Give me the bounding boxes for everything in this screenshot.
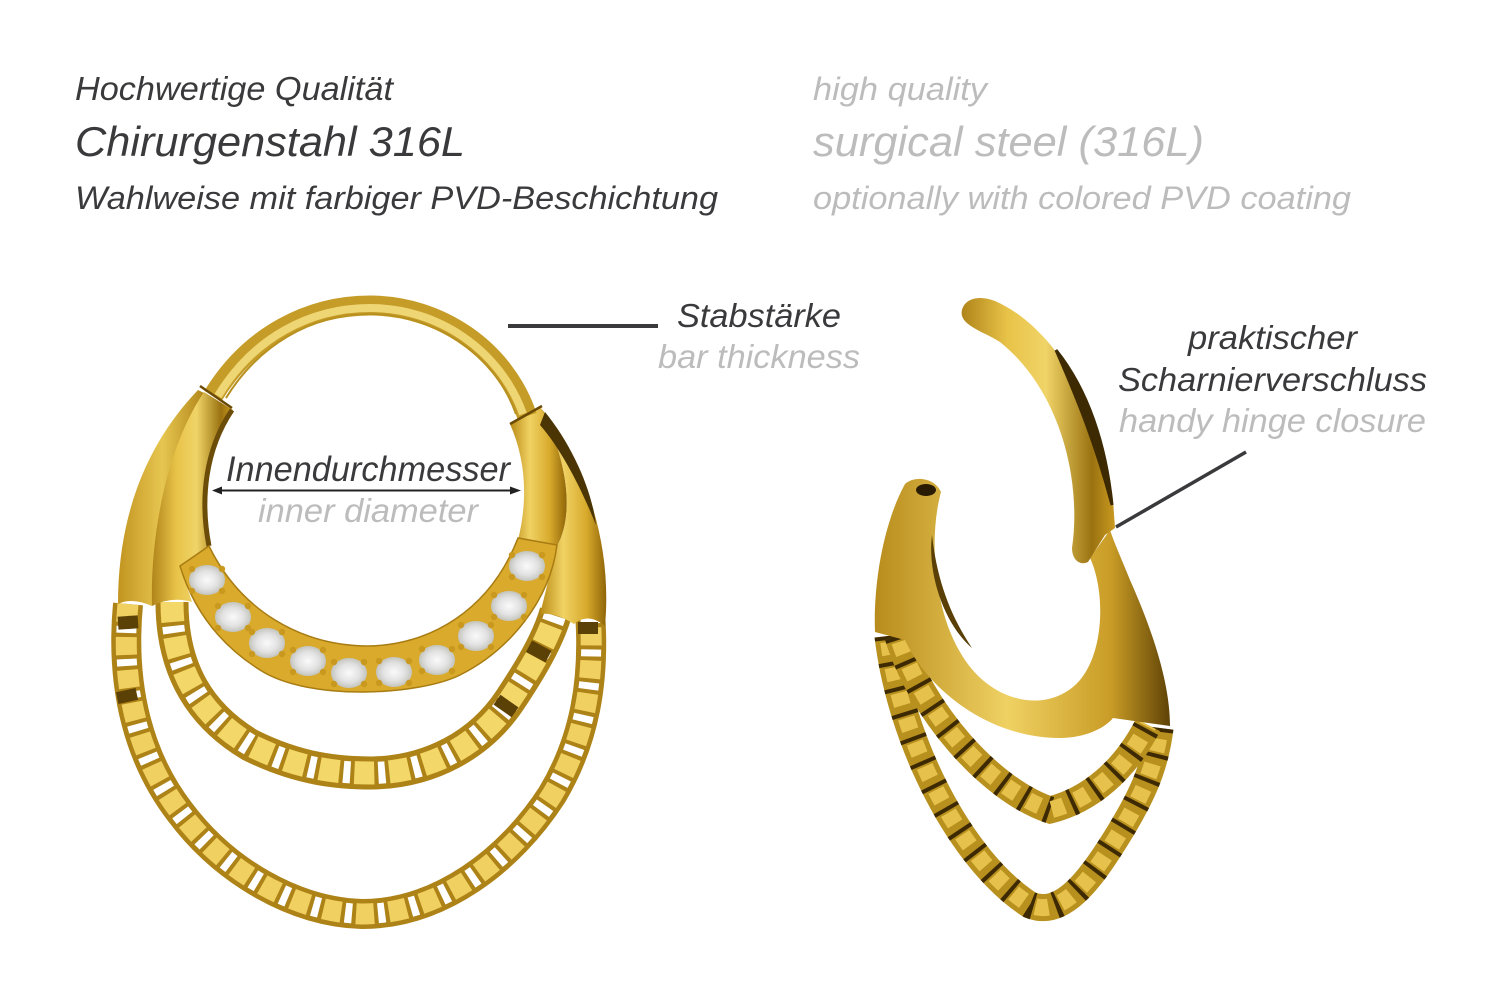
jewellery: front view of the ring with chains (116, 306, 606, 914)
tube opening (916, 484, 936, 496)
right ring side (510, 408, 567, 546)
text: Scharnierverschluss: Scharnierverschluss (1118, 361, 1427, 398)
text: Chirurgenstahl 316L: Chirurgenstahl 316L (75, 118, 465, 165)
text: inner diameter: inner diameter (258, 492, 480, 529)
callout: bar thickness (508, 297, 860, 375)
dark inner edge, left (205, 410, 232, 546)
callout: hinge closure (1116, 319, 1427, 527)
left wing (118, 390, 206, 606)
heading: English product description (813, 71, 1351, 216)
text: Innendurchmesser: Innendurchmesser (226, 450, 511, 489)
upper hinged arc (962, 298, 1115, 563)
outer chain (126, 604, 591, 914)
pave band (180, 538, 557, 692)
arrow: inner diameter (212, 486, 521, 494)
inner chain (172, 602, 556, 773)
text: bar thickness: bar thickness (658, 338, 860, 375)
leader line (508, 324, 658, 328)
label: inner diameter (212, 450, 521, 529)
left ring side (152, 392, 233, 606)
text: praktischer: praktischer (1187, 319, 1359, 356)
text: Stabstärke: Stabstärke (677, 297, 841, 334)
heading: German product description (75, 70, 718, 216)
jewellery: side view with open hinge (875, 298, 1170, 908)
front chain (898, 636, 1148, 810)
leader line (1116, 452, 1246, 527)
hinge seams (200, 386, 542, 424)
dark reflection on lower ring (931, 535, 972, 648)
text: handy hinge closure: handy hinge closure (1119, 402, 1426, 439)
text: Hochwertige Qualität: Hochwertige Qualität (75, 70, 395, 107)
dark reflection on right wing (540, 412, 596, 525)
dark chain link windows (116, 615, 598, 717)
text: Wahlweise mit farbiger PVD-Beschichtung: Wahlweise mit farbiger PVD-Beschichtung (75, 180, 718, 216)
lower ring and wings (875, 479, 1170, 738)
rear chain (888, 636, 1160, 908)
text: surgical steel (316L): surgical steel (316L) (813, 118, 1204, 165)
text: optionally with colored PVD coating: optionally with colored PVD coating (813, 180, 1351, 216)
dark reflection on upper arc (1056, 350, 1112, 505)
right wing (540, 408, 606, 626)
top ring arc (213, 306, 527, 416)
text: high quality: high quality (813, 71, 989, 107)
zirconia stones (189, 551, 545, 688)
